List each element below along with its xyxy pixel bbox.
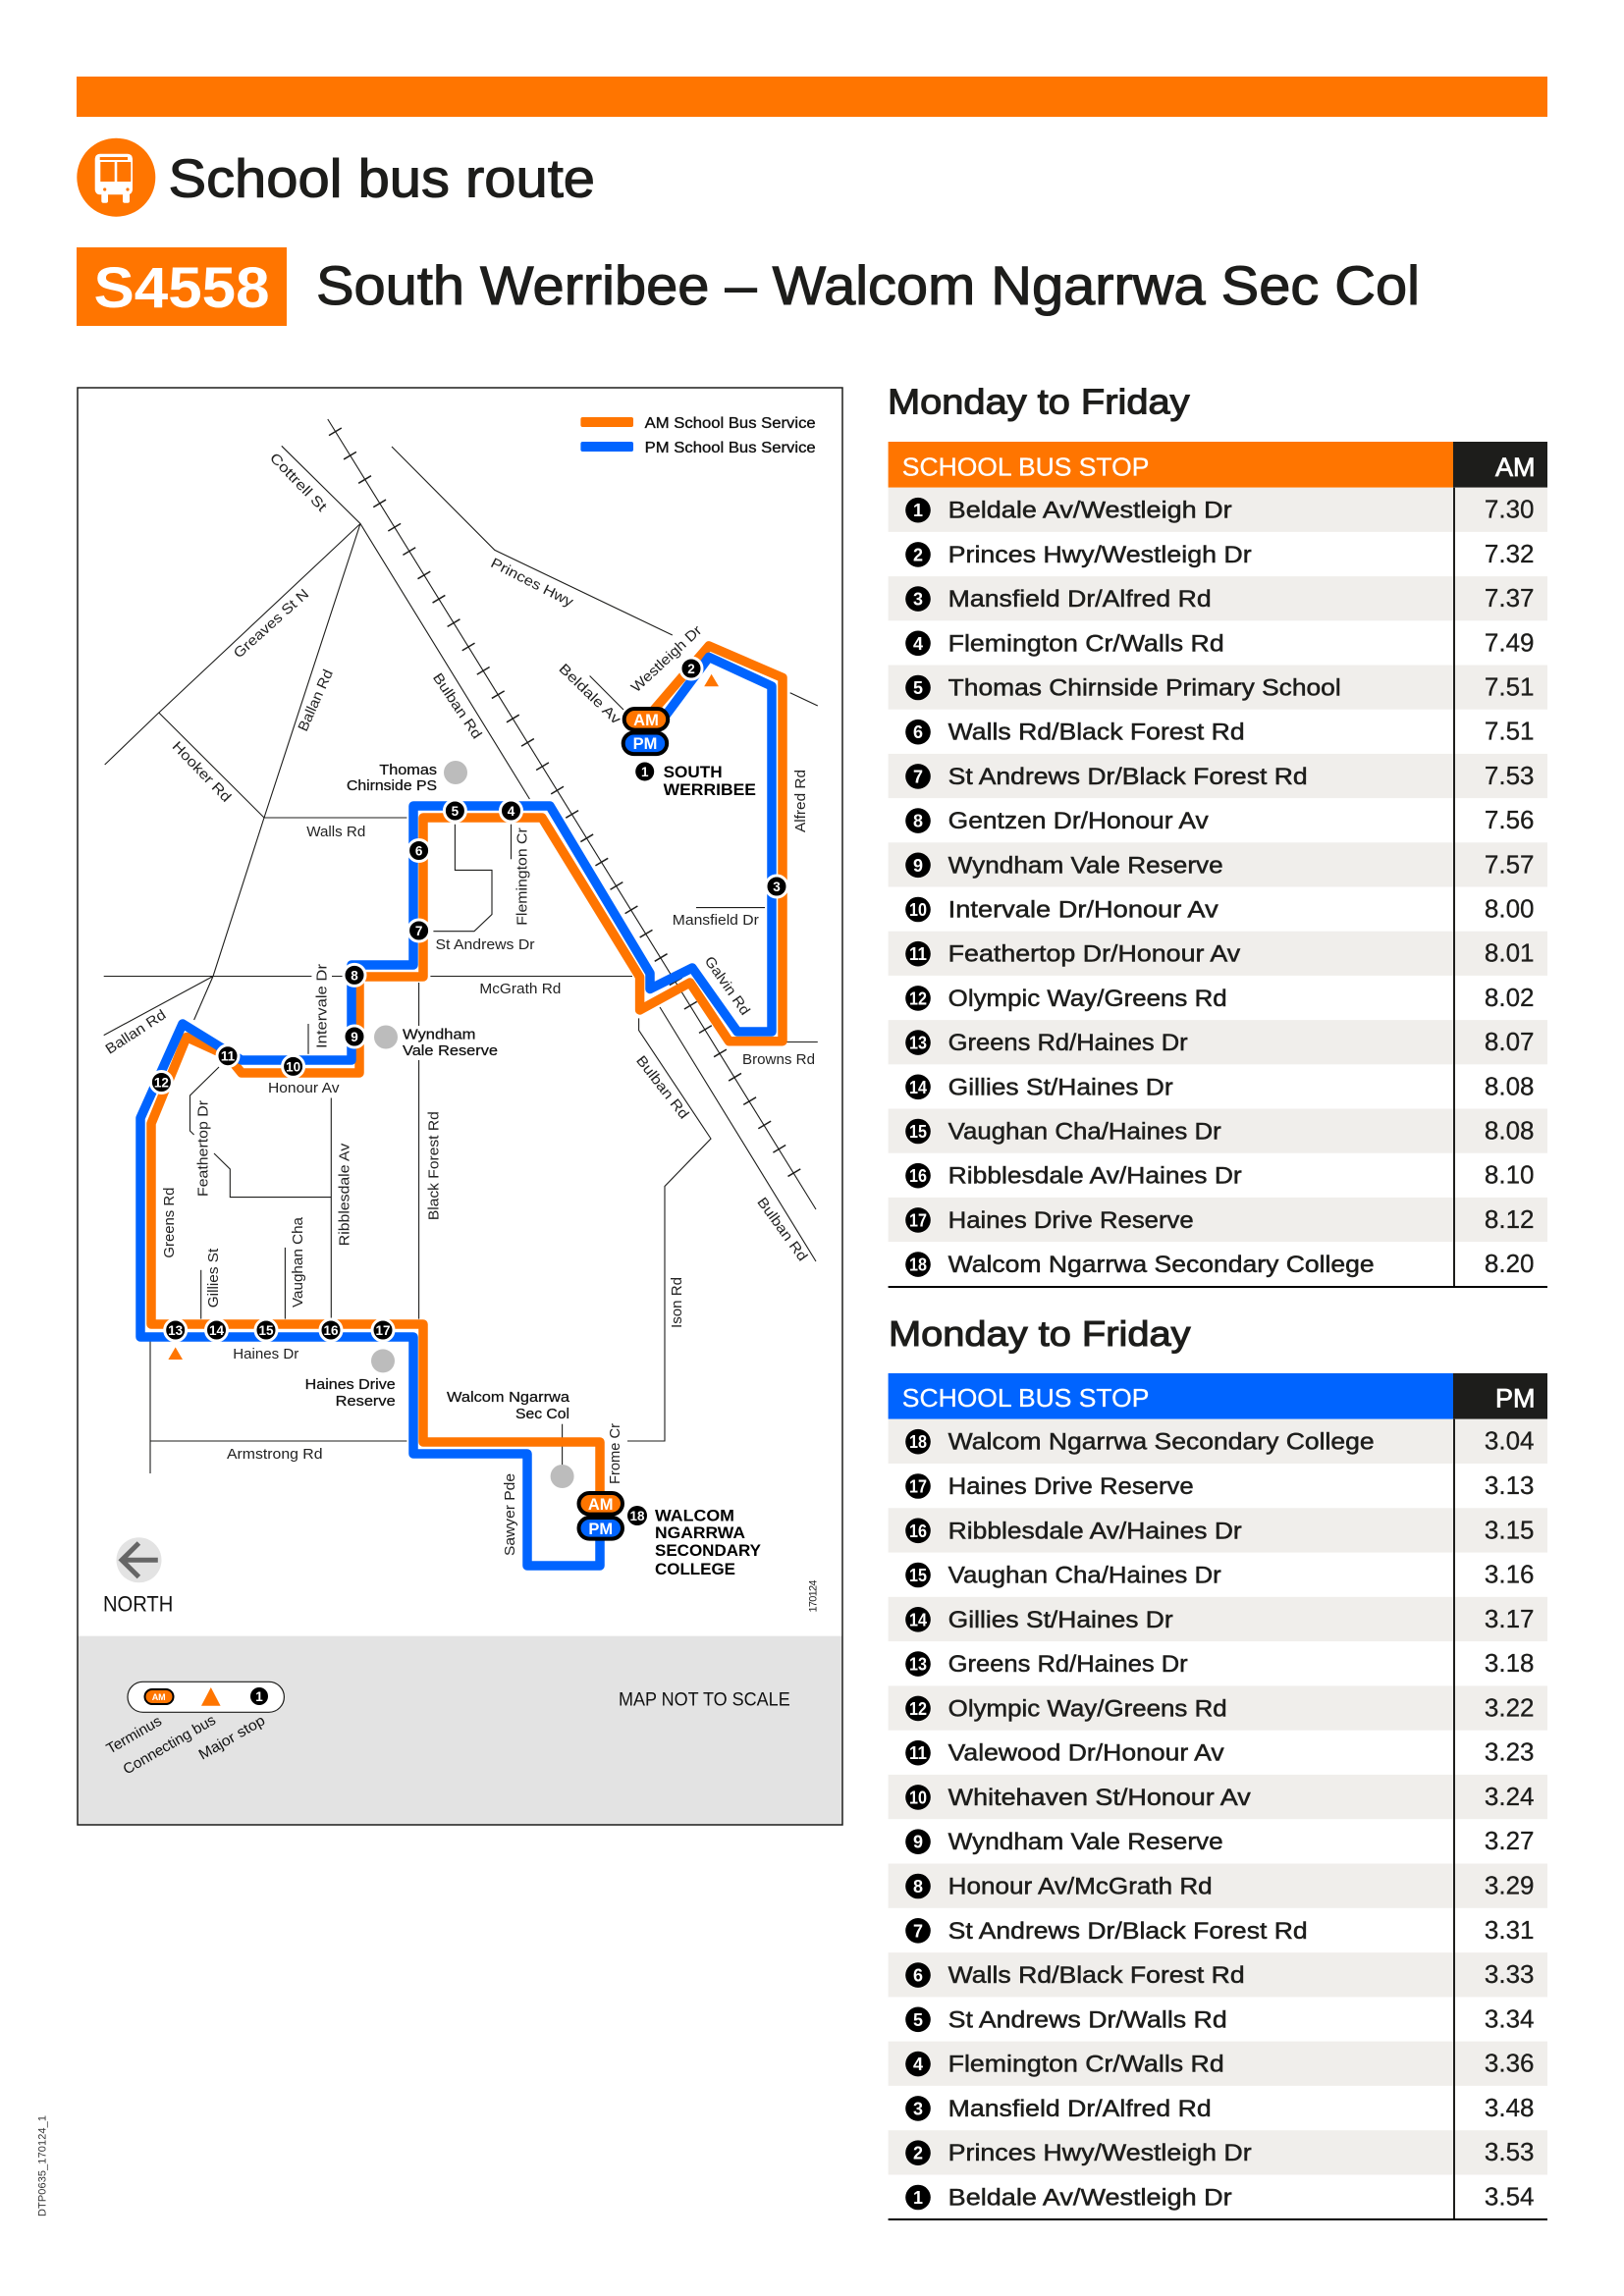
AM stop 2: 7.32: [1485, 539, 1534, 568]
document code: DTP0635_170124_1: [37, 2115, 49, 2216]
PM table header: PM: [1495, 1384, 1536, 1414]
AM stop 9: Wyndham Vale Reserve: [948, 852, 1223, 879]
PM stop 13: 13: [909, 1655, 927, 1675]
landmark labels: Wyndham: [403, 1027, 475, 1042]
PM stop 16: 3.15: [1485, 1515, 1534, 1544]
AM stop 17: [889, 1198, 1547, 1242]
PM stop 8: 8: [913, 1877, 923, 1896]
AM stop 4: 4: [913, 634, 923, 654]
street labels: Cottrell St: [266, 451, 329, 515]
north arrow: [103, 1537, 173, 1617]
PM stop 3: 3.48: [1485, 2093, 1534, 2122]
AM stop 16: Ribblesdale Av/Haines Dr: [948, 1163, 1242, 1190]
PM stop 8: Honour Av/McGrath Rd: [948, 1873, 1213, 1900]
street labels: Browns Rd: [742, 1052, 815, 1068]
service legend: PM School Bus Service: [645, 440, 816, 456]
PM stop 10: 3.24: [1485, 1782, 1534, 1811]
map stop numbers: 1: [641, 765, 649, 779]
AM stop 11: 8.01: [1485, 938, 1534, 968]
PM stop 17: 17: [909, 1476, 927, 1496]
service legend: AM School Bus Service: [645, 415, 816, 432]
PM stop 15: [905, 1559, 1534, 1588]
map symbol key: 1: [255, 1689, 263, 1704]
map stop numbers: 2: [687, 662, 695, 676]
AM stop 8: Gentzen Dr/Honour Av: [948, 808, 1209, 834]
PM stop 12: Olympic Way/Greens Rd: [948, 1695, 1227, 1722]
PM stop 9: 9: [913, 1833, 923, 1852]
map stop numbers: 8: [351, 968, 358, 983]
PM stop 1: Beldale Av/Westleigh Dr: [948, 2185, 1232, 2211]
map date code: 170124: [808, 1580, 820, 1612]
PM stop 16: 16: [909, 1522, 927, 1541]
AM stop 16: 8.10: [1485, 1160, 1534, 1190]
AM stop 5: 7.51: [1485, 671, 1534, 701]
map symbol key: [104, 1682, 284, 1778]
street labels: Ribblesdale Av: [338, 1143, 353, 1246]
PM stop 11: 11: [909, 1743, 927, 1763]
PM stop 9: 3.27: [1485, 1826, 1534, 1855]
PM stop 17: 3.13: [1485, 1470, 1534, 1500]
map symbol key: Terminus: [104, 1713, 165, 1757]
label: Walcom Ngarrwa Secondary College: WALCOM: [655, 1506, 734, 1524]
street labels: Intervale Dr: [315, 964, 331, 1048]
map stop numbers: 7: [415, 924, 422, 938]
PM stop 3: Mansfield Dr/Alfred Rd: [948, 2096, 1212, 2122]
heading: PM timetable days: Monday to Friday: [889, 1313, 1190, 1354]
AM stop 12: 12: [909, 988, 927, 1008]
terminus: Walcom Ngarrwa: PM: [588, 1521, 613, 1538]
street labels: Bulban Rd: [429, 670, 484, 742]
AM stop 13: 13: [909, 1034, 927, 1053]
terminus: Walcom Ngarrwa: [579, 1493, 623, 1539]
map stop numbers: 6: [415, 844, 423, 858]
map symbol key: Major stop: [196, 1712, 268, 1763]
street labels: Ballan Rd: [103, 1007, 169, 1058]
street labels: Princes Hwy: [488, 556, 576, 611]
PM stop 2: 2: [913, 2144, 923, 2163]
AM stop 5: [889, 666, 1547, 710]
map stop numbers: 4: [508, 804, 515, 819]
service legend: [580, 415, 816, 456]
AM stop 4: 7.49: [1485, 627, 1534, 657]
landmark labels: Vale Reserve: [403, 1042, 498, 1059]
AM stop 15: 15: [909, 1122, 927, 1142]
map stop numbers: 14: [209, 1323, 224, 1338]
AM stop 1: [889, 488, 1547, 532]
street labels: Ison Rd: [670, 1277, 685, 1328]
PM stop 18: 3.04: [1485, 1426, 1534, 1456]
map symbol key: AM: [152, 1692, 166, 1702]
AM stop 1: Beldale Av/Westleigh Dr: [948, 498, 1232, 524]
terminus: South Werribee: AM: [633, 712, 659, 729]
PM stop 8: [889, 1863, 1547, 1908]
AM stop 16: 16: [909, 1166, 927, 1186]
landmark labels: Walcom Ngarrwa: [447, 1389, 570, 1406]
PM stop 15: 15: [909, 1566, 927, 1585]
AM stop 5: Thomas Chirnside Primary School: [948, 675, 1341, 701]
AM stop 7: [889, 754, 1547, 798]
AM stop 3: [889, 576, 1547, 620]
PM stop 5: 3.34: [1485, 2003, 1534, 2033]
street labels: Black Forest Rd: [426, 1111, 442, 1220]
street labels: Galvin Rd: [701, 954, 753, 1018]
PM stop 4: Flemington Cr/Walls Rd: [948, 2052, 1224, 2078]
AM stop 7: St Andrews Dr/Black Forest Rd: [948, 764, 1308, 790]
PM stop 12: 12: [909, 1699, 927, 1719]
AM table header: SCHOOL BUS STOP: [902, 452, 1149, 481]
AM stop 6: [905, 717, 1534, 746]
street labels: Haines Dr: [233, 1347, 298, 1362]
label: Walcom Ngarrwa Secondary College: [655, 1506, 762, 1578]
AM stop 18: 18: [909, 1255, 927, 1275]
PM stop 5: [905, 2003, 1534, 2033]
AM stop 3: 3: [913, 590, 923, 610]
street labels: Gillies St: [206, 1249, 222, 1308]
route title: South Werribee – Walcom Ngarrwa Sec Col: [316, 254, 1420, 316]
AM stop 13: [889, 1020, 1547, 1064]
PM stop 13: Greens Rd/Haines Dr: [948, 1651, 1188, 1678]
top orange banner: [77, 77, 1547, 117]
PM stop 12: 3.22: [1485, 1692, 1534, 1722]
terminus: Walcom Ngarrwa: AM: [588, 1496, 614, 1514]
heading: School bus route: School bus route: [169, 148, 595, 209]
PM stop 10: 10: [909, 1788, 927, 1807]
AM stop 2: Princes Hwy/Westleigh Dr: [948, 542, 1252, 568]
map stop numbers: [154, 662, 781, 1523]
map stop numbers: 12: [154, 1076, 169, 1090]
map stop numbers: 15: [258, 1323, 274, 1338]
road network: [104, 446, 818, 1476]
PM stop 2: [889, 2130, 1547, 2175]
AM stop 9: [889, 842, 1547, 887]
AM stop 9: 9: [913, 856, 923, 876]
AM stop 12: 8.02: [1485, 983, 1534, 1012]
AM stop 3: 7.37: [1485, 583, 1534, 613]
PM table header: SCHOOL BUS STOP: [902, 1383, 1149, 1413]
landmark labels: Sec Col: [515, 1406, 569, 1422]
landmark labels: Chirnside PS: [347, 777, 437, 794]
AM stop 6: Walls Rd/Black Forest Rd: [948, 720, 1245, 746]
AM stop 16: [905, 1160, 1534, 1190]
street labels: Beldale Av: [556, 662, 624, 728]
PM stop 6: Walls Rd/Black Forest Rd: [948, 1962, 1245, 1989]
street labels: Walls Rd: [306, 825, 365, 840]
AM stop 14: [905, 1071, 1534, 1100]
PM stop 12: [889, 1685, 1547, 1731]
PM stop 10: Whitehaven St/Honour Av: [948, 1785, 1251, 1811]
AM stop 6: 6: [913, 722, 923, 742]
AM stop 17: Haines Drive Reserve: [948, 1207, 1194, 1234]
street labels: Ballan Rd: [296, 667, 337, 734]
map stop numbers: 13: [168, 1323, 184, 1338]
label: Walcom Ngarrwa Secondary College: COLLEGE: [655, 1560, 735, 1578]
PM stop 17: [905, 1470, 1534, 1500]
north arrow: NORTH: [103, 1592, 173, 1617]
map stop numbers: 10: [286, 1059, 300, 1074]
map stop numbers: 16: [323, 1323, 339, 1338]
PM table header: [889, 1373, 1547, 1419]
PM stop 6: [889, 1952, 1547, 1997]
AM stop 14: 8.08: [1485, 1071, 1534, 1100]
AM stop 11: Feathertop Dr/Honour Av: [948, 941, 1240, 968]
street labels: Bulban Rd: [753, 1195, 810, 1264]
AM stop 13: Greens Rd/Haines Dr: [948, 1030, 1188, 1056]
PM stop 4: [889, 2042, 1547, 2086]
PM stop 16: Ribblesdale Av/Haines Dr: [948, 1518, 1242, 1544]
PM stop 2: Princes Hwy/Westleigh Dr: [948, 2140, 1252, 2166]
AM stop 17: 17: [909, 1210, 927, 1230]
AM stop 5: 5: [913, 678, 923, 698]
AM stop 15: Vaughan Cha/Haines Dr: [948, 1119, 1221, 1145]
street labels: [103, 451, 815, 1556]
AM stop 13: 8.07: [1485, 1027, 1534, 1056]
label: South Werribee: WERRIBEE: [664, 780, 756, 799]
panel: PM timetable: [889, 1373, 1547, 2220]
map stop numbers: 9: [351, 1030, 358, 1044]
map stop numbers: 18: [629, 1509, 645, 1523]
AM stop 15: [889, 1109, 1547, 1153]
AM stop 8: [905, 805, 1534, 834]
PM stop 14: [889, 1597, 1547, 1641]
street labels: Sawyer Pde: [503, 1473, 518, 1556]
PM stop 4: 4: [913, 2055, 923, 2074]
PM stop 1: 1: [913, 2188, 923, 2208]
street labels: Frome Cr: [608, 1423, 623, 1484]
AM route line: [151, 646, 783, 1504]
AM stop 18: Walcom Ngarrwa Secondary College: [948, 1252, 1375, 1278]
AM stop 11: 11: [909, 944, 927, 964]
PM stop 1: [905, 2181, 1534, 2211]
terminus: South Werribee: PM: [633, 735, 657, 753]
AM stop 12: [905, 983, 1534, 1012]
PM stop 14: 14: [909, 1610, 927, 1629]
AM stop 3: Mansfield Dr/Alfred Rd: [948, 586, 1212, 613]
AM stop 8: 7.56: [1485, 805, 1534, 834]
AM stop 8: 8: [913, 812, 923, 831]
PM stop 15: Vaughan Cha/Haines Dr: [948, 1563, 1221, 1588]
AM stop 15: 8.08: [1485, 1115, 1534, 1145]
street labels: St Andrews Dr: [436, 937, 535, 953]
map stop numbers: 11: [221, 1049, 236, 1064]
AM stop 2: 2: [913, 545, 923, 564]
AM stop 17: 8.12: [1485, 1204, 1534, 1234]
PM stop 6: 6: [913, 1966, 923, 1986]
PM stop 2: 3.53: [1485, 2137, 1534, 2166]
PM route line: [140, 657, 772, 1566]
landmark labels: Haines Drive: [305, 1376, 396, 1393]
PM stop 11: Valewood Dr/Honour Av: [948, 1740, 1224, 1767]
AM table header: [889, 442, 1547, 488]
route number badge: [77, 247, 287, 326]
PM stop 3: 3: [913, 2099, 923, 2118]
terminus: South Werribee: [623, 709, 668, 754]
railway line: [328, 419, 816, 1209]
map symbol key: Connecting bus: [120, 1712, 219, 1778]
AM stop 12: Olympic Way/Greens Rd: [948, 986, 1227, 1012]
AM stop 9: 7.57: [1485, 849, 1534, 879]
landmark labels: [305, 762, 570, 1422]
street labels: Alfred Rd: [793, 770, 809, 832]
PM stop 18: [889, 1419, 1547, 1464]
label: South Werribee: [664, 763, 756, 799]
AM stop 6: 7.51: [1485, 717, 1534, 746]
PM stop 5: 5: [913, 2010, 923, 2030]
AM stop 10: 8.00: [1485, 893, 1534, 923]
PM stop 13: 3.18: [1485, 1648, 1534, 1678]
label: Walcom Ngarrwa Secondary College: SECONDARY: [655, 1541, 762, 1560]
PM stop 4: 3.36: [1485, 2049, 1534, 2078]
AM stop 18: 8.20: [1485, 1249, 1534, 1278]
AM stop 10: 10: [909, 900, 927, 920]
AM stop 10: [905, 893, 1534, 923]
map scale note: MAP NOT TO SCALE: [619, 1690, 790, 1711]
street labels: Flemington Cr: [515, 828, 531, 926]
landmark labels: Reserve: [336, 1393, 396, 1410]
PM stop 10: [889, 1775, 1547, 1819]
panel: AM timetable: [889, 442, 1547, 1288]
street labels: Greens Rd: [162, 1188, 178, 1258]
PM stop 14: Gillies St/Haines Dr: [948, 1607, 1173, 1633]
AM stop 1: 1: [913, 501, 923, 520]
PM stop 16: [889, 1508, 1547, 1553]
street labels: Armstrong Rd: [227, 1447, 322, 1463]
PM stop 6: 3.33: [1485, 1959, 1534, 1989]
PM stop 7: [905, 1915, 1534, 1945]
label: Walcom Ngarrwa Secondary College: NGARRWA: [655, 1523, 745, 1542]
landmark labels: Thomas: [379, 762, 437, 778]
PM stop 7: 3.31: [1485, 1915, 1534, 1945]
street labels: Vaughan Cha: [291, 1216, 306, 1308]
PM stop 9: Wyndham Vale Reserve: [948, 1829, 1223, 1855]
AM stop 7: 7.53: [1485, 761, 1534, 790]
PM stop 18: Walcom Ngarrwa Secondary College: [948, 1429, 1375, 1456]
heading: AM timetable days: Monday to Friday: [888, 382, 1190, 422]
PM stop 14: 3.17: [1485, 1604, 1534, 1633]
AM stop 18: [905, 1249, 1534, 1278]
PM stop 7: St Andrews Dr/Black Forest Rd: [948, 1918, 1308, 1945]
street labels: Honour Av: [268, 1081, 340, 1096]
label: South Werribee: SOUTH: [664, 763, 723, 781]
PM stop 1: 3.54: [1485, 2181, 1534, 2211]
map stop numbers: 3: [773, 880, 781, 894]
connecting bus markers: [168, 674, 719, 1360]
AM stop 10: Intervale Dr/Honour Av: [948, 897, 1218, 923]
icon: school bus: [77, 138, 155, 217]
AM stop 7: 7: [913, 767, 923, 786]
AM stop 14: 14: [909, 1078, 927, 1097]
PM stop 15: 3.16: [1485, 1559, 1534, 1588]
AM stop 4: Flemington Cr/Walls Rd: [948, 630, 1224, 657]
PM stop 11: [905, 1737, 1534, 1767]
map stop markers: [150, 658, 787, 1525]
PM stop 11: 3.23: [1485, 1737, 1534, 1767]
PM stop 8: 3.29: [1485, 1871, 1534, 1900]
street labels: Feathertop Dr: [196, 1100, 212, 1197]
landmark dots: [371, 761, 574, 1488]
PM stop 17: Haines Drive Reserve: [948, 1473, 1194, 1500]
AM stop 2: [905, 539, 1534, 568]
street labels: Hooker Rd: [169, 739, 234, 806]
map stop numbers: 17: [375, 1323, 391, 1338]
PM stop 7: 7: [913, 1921, 923, 1941]
AM stop 4: [905, 627, 1534, 657]
AM table header: AM: [1495, 453, 1536, 482]
street labels: McGrath Rd: [479, 982, 561, 997]
street labels: Westleigh Dr: [628, 622, 705, 696]
PM stop 5: St Andrews Dr/Walls Rd: [948, 2006, 1227, 2033]
route number badge: S4558: [94, 256, 269, 320]
PM stop 3: [905, 2093, 1534, 2122]
AM stop 14: Gillies St/Haines Dr: [948, 1074, 1173, 1100]
panel: route map: [78, 388, 842, 1825]
AM stop 1: 7.30: [1485, 495, 1534, 524]
street labels: Mansfield Dr: [673, 913, 759, 929]
map footer background: [78, 1636, 842, 1825]
PM stop 9: [905, 1826, 1534, 1855]
PM stop 13: [905, 1648, 1534, 1678]
map stop numbers: 5: [452, 804, 460, 819]
AM stop 11: [889, 932, 1547, 976]
street labels: Bulban Rd: [632, 1053, 691, 1122]
PM stop 18: 18: [909, 1432, 927, 1452]
street labels: Greaves St N: [231, 586, 312, 662]
